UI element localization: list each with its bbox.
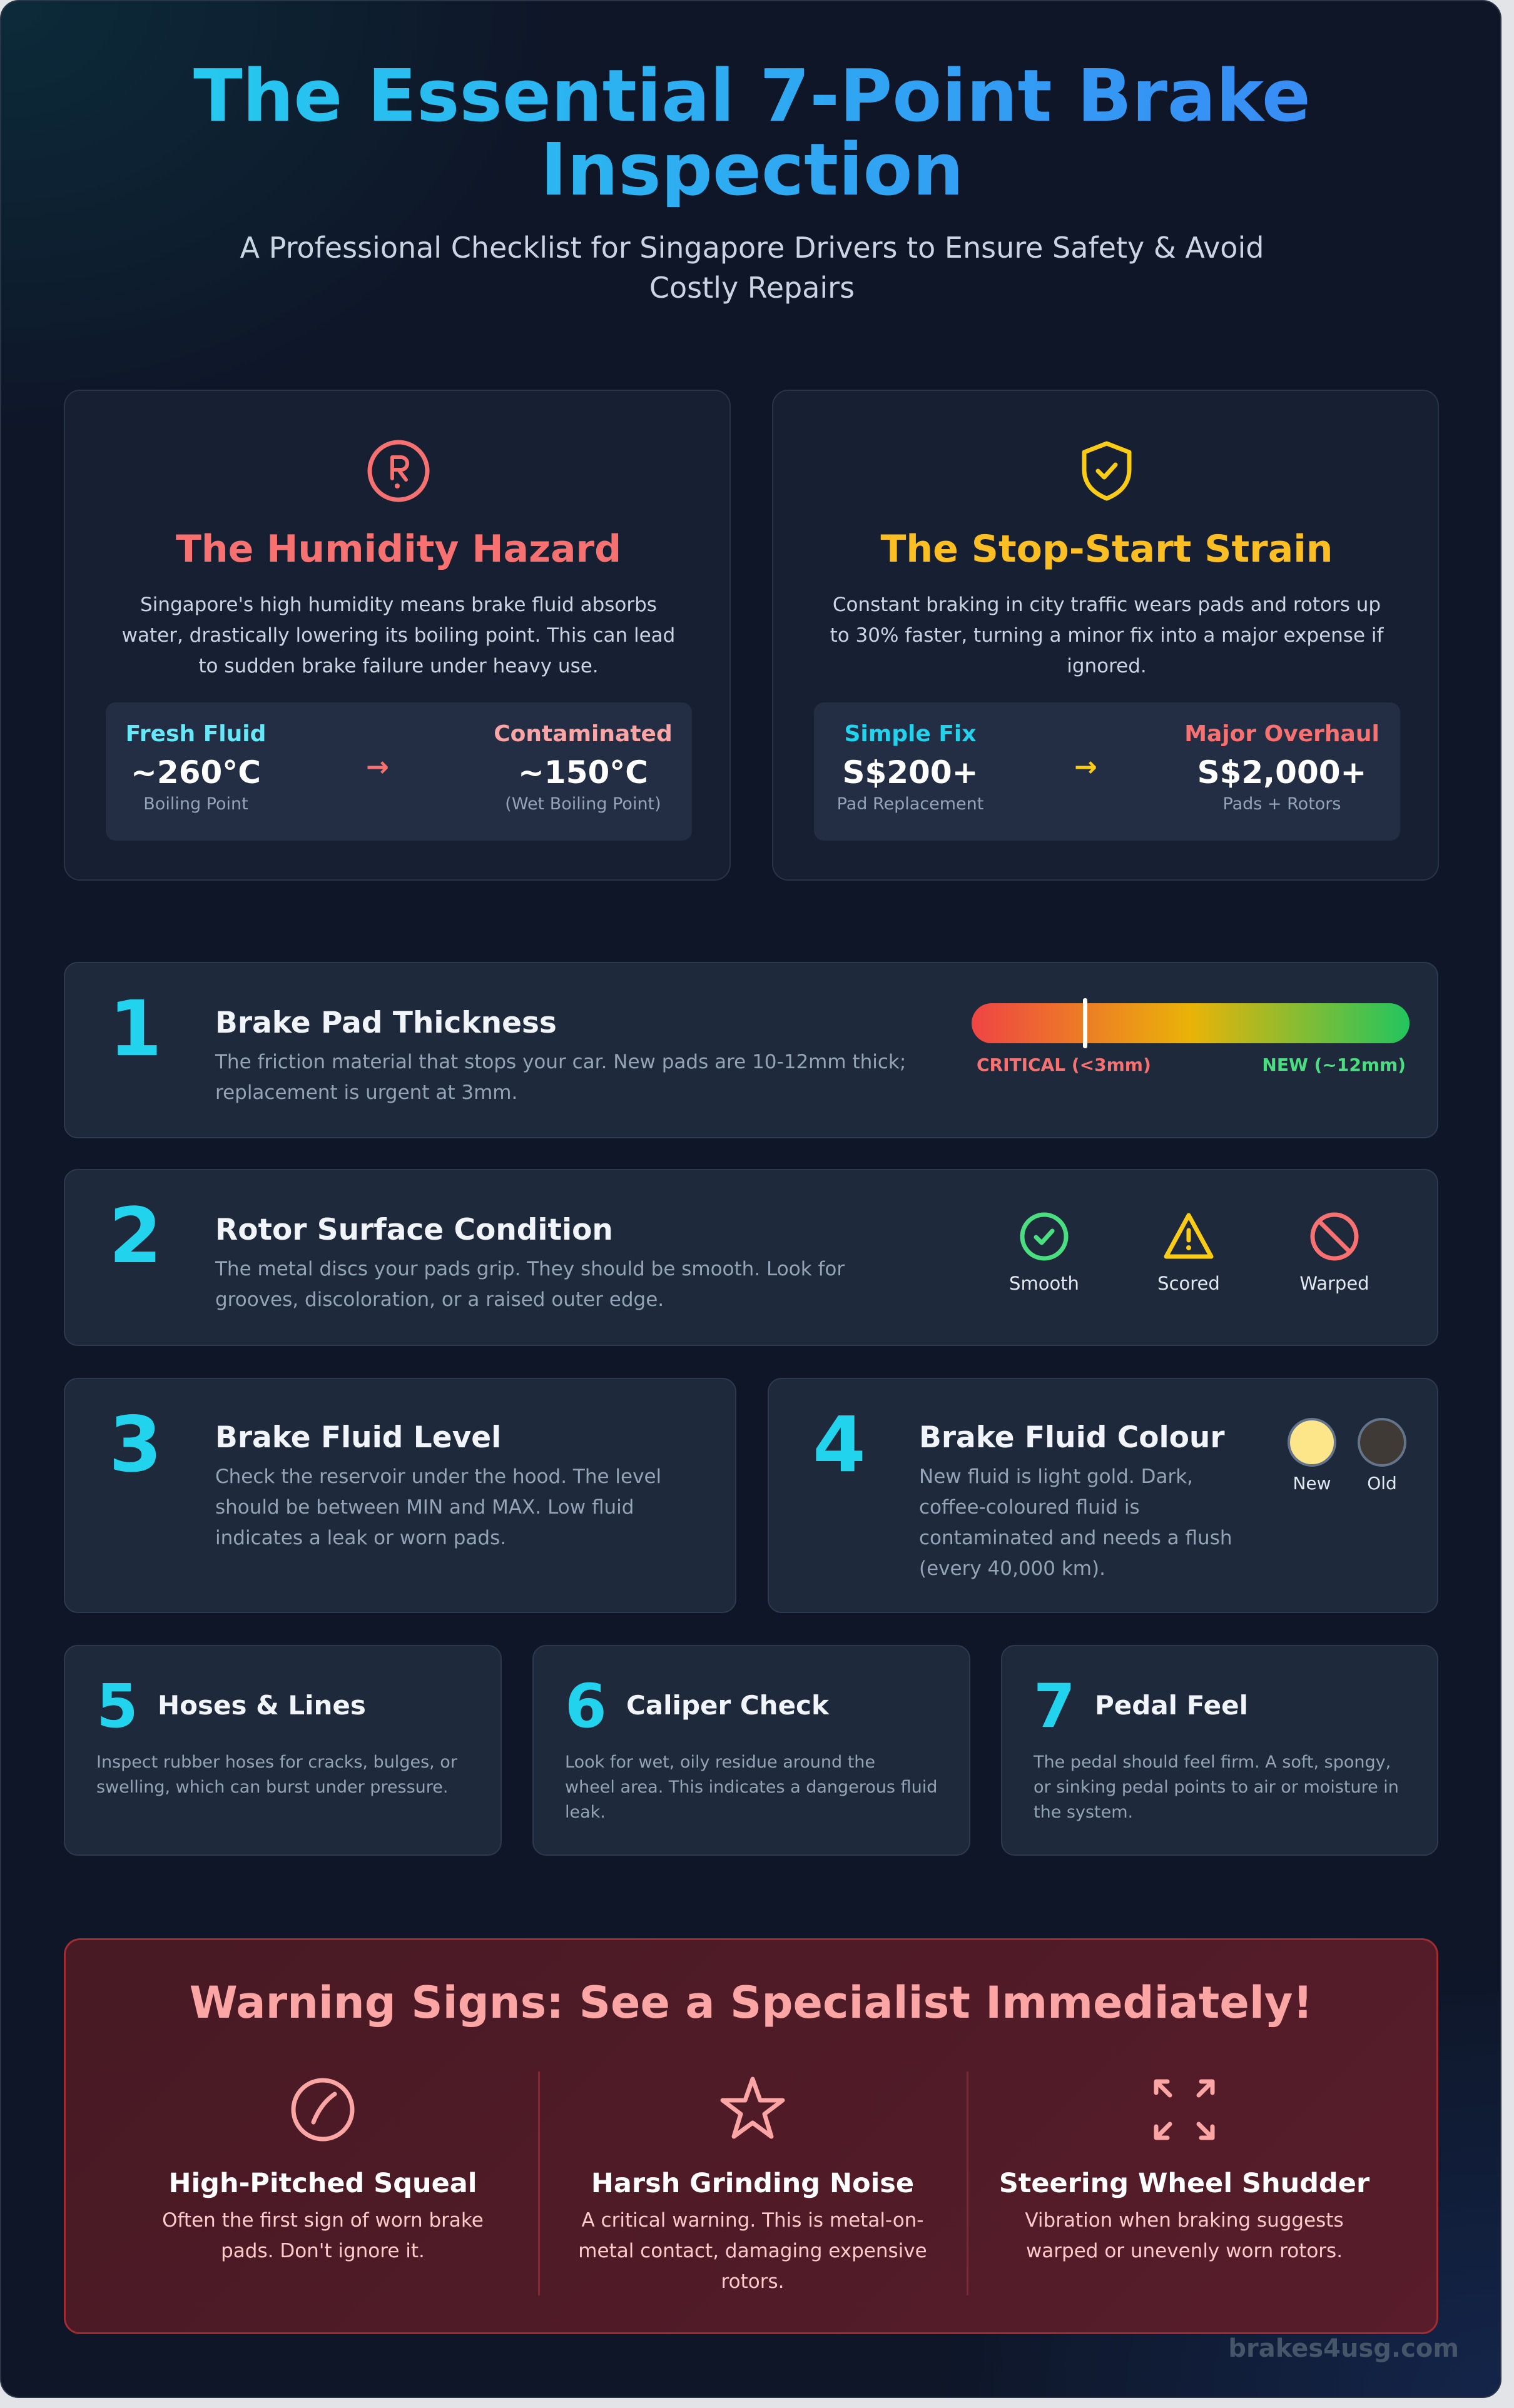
item 1: brake pad thickness	[64, 962, 1438, 1138]
heading: The Stop-Start Strain	[881, 527, 1333, 571]
swatches: Old	[1367, 1473, 1397, 1494]
stats: boiling point: Fresh Fluid	[126, 721, 266, 747]
panel: warning signs	[64, 1938, 1438, 2334]
sign: shudder	[999, 2079, 1370, 2262]
sign: squeal: High-Pitched Squeal	[168, 2168, 477, 2199]
item 2: rotor surface	[64, 1169, 1438, 1346]
text	[830, 594, 1384, 677]
text: Constant braking in city traffic wears pads and rotors up	[833, 594, 1381, 616]
gauge	[972, 998, 1410, 1075]
item 7: pedal: The pedal should feel firm. A soft, spongy, or sinking pedal points to air or moisture in the system.	[1034, 1753, 1399, 1822]
title	[1, 59, 1503, 207]
icon: humidity	[368, 440, 429, 502]
stats: cost: Pads + Rotors	[1223, 794, 1341, 814]
sign: grinding	[578, 2077, 927, 2293]
stats: cost: S$200+	[842, 754, 978, 791]
stats: boiling point: Boiling Point	[143, 794, 248, 814]
stats: boiling point: →	[366, 751, 389, 783]
stats: cost: Major Overhaul	[1184, 721, 1379, 747]
stats: boiling point: (Wet Boiling Point)	[505, 794, 661, 814]
icons: rotor states: Smooth	[1009, 1273, 1079, 1294]
panel: humidity hazard	[64, 390, 731, 881]
item 5: hoses: Inspect rubber hoses for cracks, bulges, or swelling, which can burst under pressure.	[96, 1753, 457, 1797]
item 1: brake pad thickness: 1	[109, 984, 162, 1073]
stats: cost	[814, 702, 1400, 841]
stats: cost: →	[1074, 751, 1097, 783]
item 4: fluid colour: Brake Fluid Colour	[919, 1420, 1225, 1455]
icons: rotor states	[1009, 1212, 1369, 1294]
stats: boiling point: ~260°C	[131, 754, 261, 791]
item 5: hoses	[64, 1645, 502, 1856]
gauge: NEW (~12mm)	[1262, 1055, 1406, 1075]
stats: cost: Pad Replacement	[837, 794, 983, 814]
item 4: fluid colour: 4	[813, 1400, 866, 1489]
item 7: pedal	[1001, 1645, 1438, 1856]
item 3: fluid level: Brake Fluid Level	[215, 1420, 501, 1455]
sign: shudder: Vibration when braking suggests warped or unevenly worn rotors.	[1025, 2209, 1344, 2262]
item 6: caliper	[532, 1645, 970, 1856]
panel: stop-start strain	[772, 390, 1439, 881]
item 2: rotor surface: 2	[109, 1191, 162, 1280]
sign: grinding: Harsh Grinding Noise	[591, 2168, 914, 2199]
stats: cost: S$2,000+	[1197, 754, 1366, 791]
item 1: brake pad thickness: Brake Pad Thickness	[215, 1006, 557, 1040]
item 3: fluid level: 3	[109, 1400, 162, 1489]
item 6: caliper: 6	[565, 1671, 607, 1741]
item 6: caliper: wheel area. This indicates a dangerous fluid leak.	[565, 1778, 937, 1822]
sign: shudder: Steering Wheel Shudder	[999, 2168, 1369, 2199]
item 2: rotor surface: The metal discs your pads grip. They should be smooth. Look for grooves, discoloration, or a raised outer edge.	[215, 1258, 845, 1311]
item 7: pedal: 7	[1034, 1671, 1075, 1741]
text: to 30% faster, turning a minor fix into a major expense if ignored.	[830, 624, 1383, 677]
stats: boiling point: ~150°C	[518, 754, 648, 791]
stats: boiling point	[106, 702, 692, 841]
heading: The Humidity Hazard	[176, 527, 621, 571]
item 3: fluid level	[64, 1378, 736, 1613]
stats: boiling point: Contaminated	[494, 721, 673, 747]
subtitle: A Professional Checklist for Singapore Drivers to Ensure Safety & Avoid Costly Repairs	[240, 231, 1264, 305]
title: Inspection	[541, 128, 963, 212]
icon: shield	[1082, 442, 1131, 500]
item 6: caliper: Caliper Check	[626, 1690, 829, 1721]
text: Singapore's high humidity means brake fluid absorbs water, drastically lowering its boiling point. This can lead to sudden brake failure under heavy use.	[122, 594, 675, 677]
icons: rotor states: Scored	[1157, 1273, 1220, 1294]
item 1: brake pad thickness: The friction material that stops your car. New pads are 10-12mm thick; replacement is urgent at 3mm.	[215, 1051, 906, 1104]
footer url: brakes4usg.com	[1228, 2334, 1459, 2363]
item 5: hoses: 5	[96, 1671, 138, 1741]
sign: grinding: A critical warning. This is metal-on-metal contact, damaging expensive rotors.	[578, 2209, 927, 2293]
sign: squeal	[162, 2078, 484, 2262]
sign: squeal: Often the first sign of worn brake pads. Don't ignore it.	[162, 2209, 484, 2262]
warning heading: Warning Signs: See a Specialist Immediately!	[190, 1977, 1313, 2028]
title: The Essential 7-Point Brake	[193, 54, 1311, 138]
swatches: New	[1293, 1473, 1331, 1494]
item 3: fluid level: Check the reservoir under the hood. The level should be between MIN and MAX. Low fluid indicates a leak or worn pads.	[215, 1465, 661, 1549]
item 4: fluid colour	[768, 1378, 1438, 1613]
item 4: fluid colour: New fluid is light gold. Dark, coffee-coloured fluid is contaminated and needs a flush (every 40,000 km).	[919, 1465, 1232, 1580]
item 2: rotor surface: Rotor Surface Condition	[215, 1213, 613, 1247]
item 7: pedal: Pedal Feel	[1095, 1690, 1248, 1721]
icons: rotor states: Warped	[1299, 1273, 1369, 1294]
item 5: hoses: Hoses & Lines	[158, 1690, 366, 1721]
stats: cost: Simple Fix	[845, 721, 976, 747]
item 6: caliper: Look for wet, oily residue around the	[565, 1753, 875, 1772]
swatches	[1288, 1418, 1406, 1494]
gauge: CRITICAL (<3mm)	[977, 1055, 1151, 1075]
